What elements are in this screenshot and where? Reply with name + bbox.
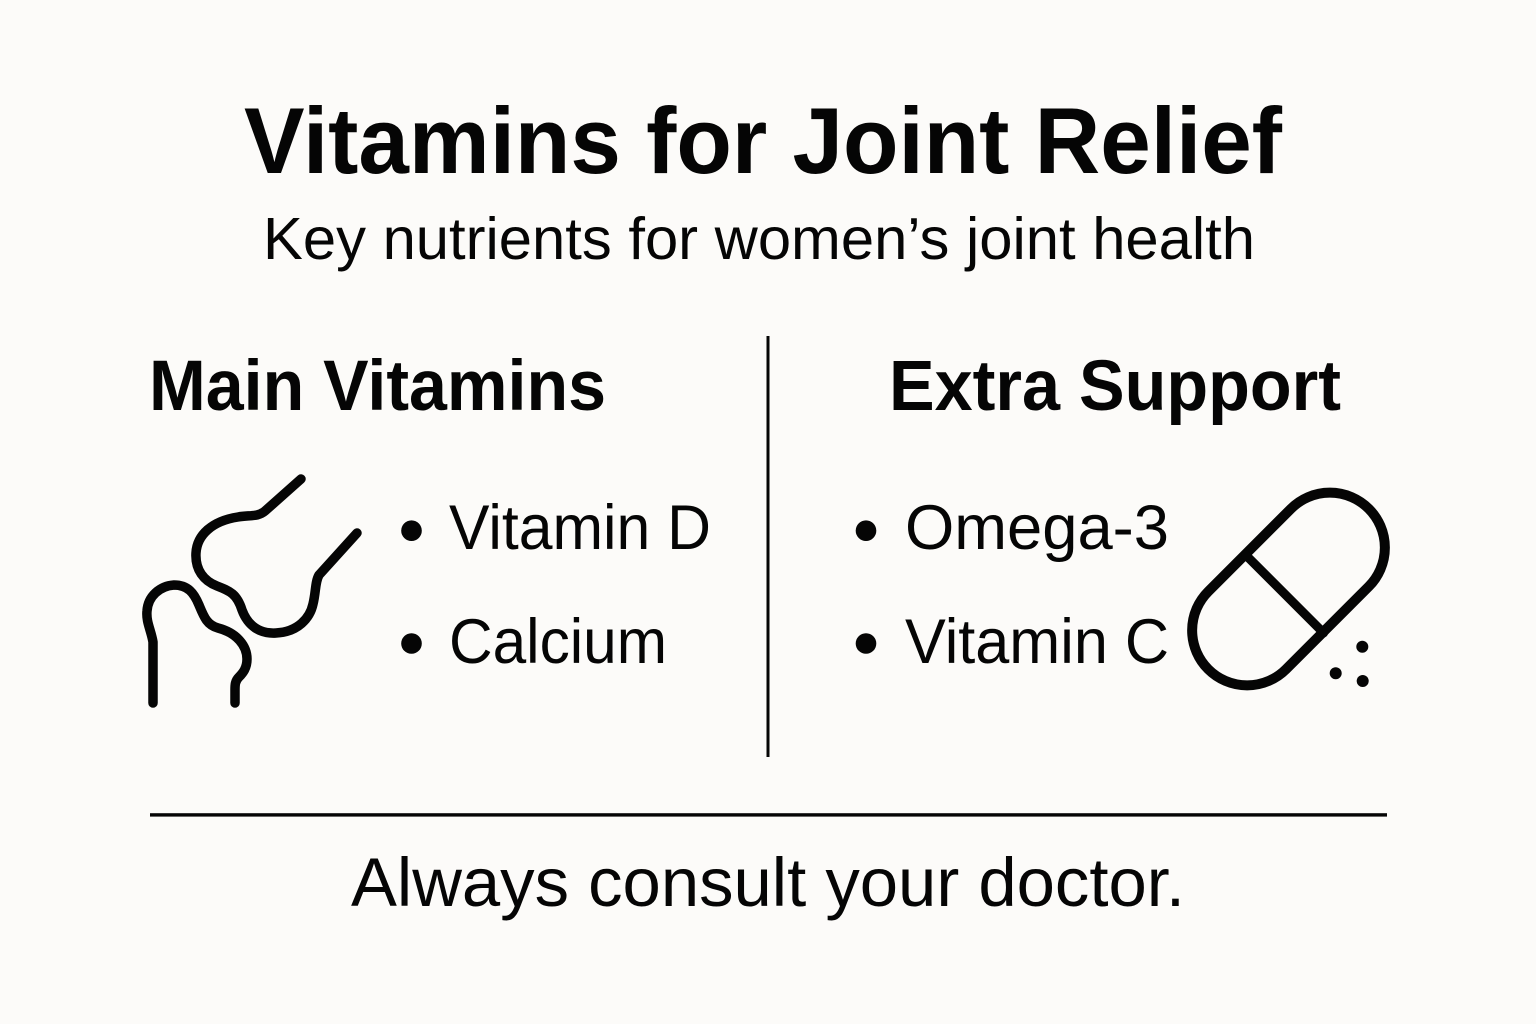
list: extra support: Vitamin C (905, 607, 1169, 677)
center divider (766, 336, 770, 757)
icon: joint (147, 479, 357, 703)
list: extra support: Omega-3 (905, 493, 1169, 563)
subtitle: Key nutrients for women’s joint health (263, 206, 1255, 272)
list: main vitamins: Calcium (449, 607, 667, 677)
panel: extra support (856, 347, 1408, 708)
icon: capsule (1169, 470, 1408, 708)
panel: main vitamins (147, 347, 711, 703)
list: main vitamins: Vitamin D (449, 493, 711, 563)
footer note: Always consult your doctor. (351, 844, 1185, 921)
heading: extra support: Extra Support (889, 347, 1341, 426)
footer divider (150, 813, 1387, 817)
list: main vitamins (401, 493, 711, 677)
heading: main vitamins: Main Vitamins (149, 347, 606, 426)
list: extra support (856, 493, 1169, 677)
title: Vitamins for Joint Relief (244, 88, 1283, 193)
